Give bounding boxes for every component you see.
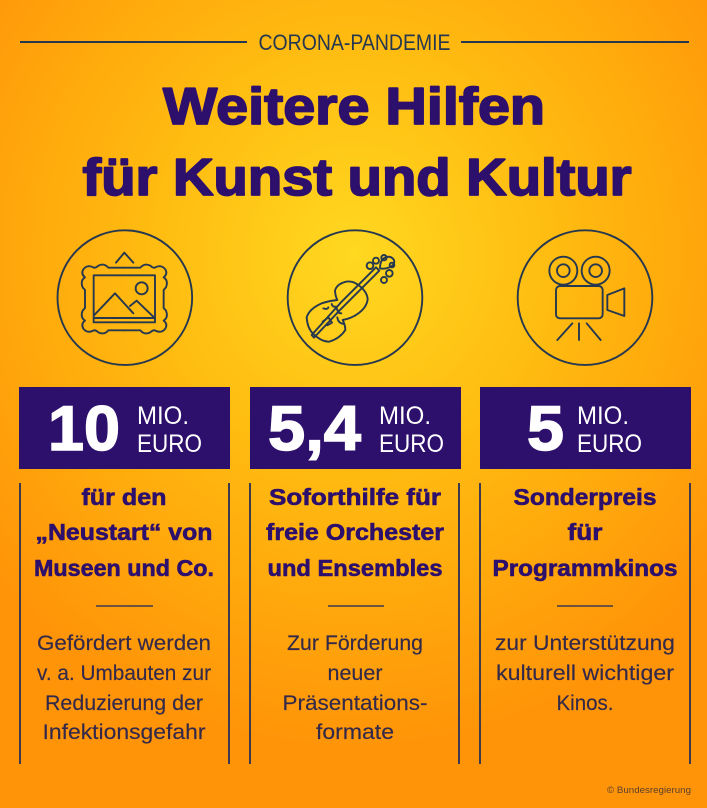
amount banner: MIO. xyxy=(137,402,189,430)
credit: © Bundesregierung xyxy=(607,785,691,796)
subheading: für den xyxy=(82,484,166,510)
panel: 10 Mio. Euro xyxy=(19,387,230,744)
amount banner: MIO. xyxy=(577,402,629,430)
amount banner: EURO xyxy=(379,430,444,458)
panel: 5 Mio. Euro xyxy=(480,387,691,715)
header label: CORONA-PANDEMIE xyxy=(258,30,450,55)
subheading: für xyxy=(568,519,603,545)
description: Gefördert werden xyxy=(37,632,211,655)
icon: framed picture xyxy=(57,230,192,365)
title xyxy=(82,78,632,207)
description: Infektionsgefahr xyxy=(42,721,206,744)
subheading: „Neustart“ von xyxy=(36,519,212,545)
description: v. a. Umbauten zur xyxy=(37,662,211,685)
amount banner: MIO. xyxy=(379,402,431,430)
description xyxy=(495,632,675,715)
description: Zur Förderung xyxy=(287,632,423,655)
amount banner xyxy=(250,387,461,469)
subheading: und Ensembles xyxy=(268,555,442,581)
subheading: Soforthilfe für xyxy=(269,484,441,510)
icon: violin xyxy=(288,230,422,365)
title: für Kunst und Kultur xyxy=(82,149,632,207)
amount banner: 5,4 xyxy=(268,394,361,464)
subheading xyxy=(492,484,678,581)
description xyxy=(282,632,428,744)
description: Kinos. xyxy=(556,692,614,715)
amount banner: 10 xyxy=(48,394,120,464)
description: neuer xyxy=(328,662,382,685)
amount banner xyxy=(19,387,230,469)
description: zur Unterstützung xyxy=(495,632,675,655)
description xyxy=(37,632,211,744)
description: kulturell wichtiger xyxy=(496,662,674,685)
description: Präsentations- xyxy=(282,692,428,715)
subheading xyxy=(34,484,214,581)
title: Weitere Hilfen xyxy=(163,78,545,136)
description: Reduzierung der xyxy=(45,692,203,715)
amount banner xyxy=(480,387,691,469)
subheading xyxy=(266,484,444,581)
subheading: freie Orchester xyxy=(266,519,444,545)
icon: film camera xyxy=(518,230,652,365)
amount banner: 5 xyxy=(527,394,564,464)
subheading: Museen und Co. xyxy=(34,555,214,581)
subheading: Sonderpreis xyxy=(514,484,656,510)
amount banner: EURO xyxy=(577,430,642,458)
description: formate xyxy=(316,721,394,744)
subheading: Programmkinos xyxy=(492,555,678,581)
amount banner: EURO xyxy=(137,430,202,458)
panel: 5,4 Mio. Euro xyxy=(250,387,461,744)
